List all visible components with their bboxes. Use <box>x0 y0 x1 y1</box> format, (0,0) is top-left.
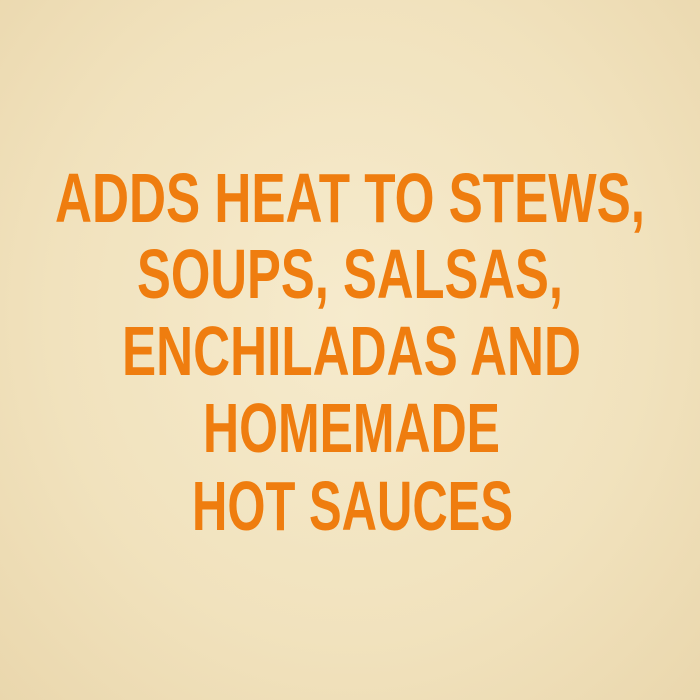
line 5: HOT SAUCES <box>192 467 513 545</box>
line 4: HOMEMADE <box>203 389 500 467</box>
